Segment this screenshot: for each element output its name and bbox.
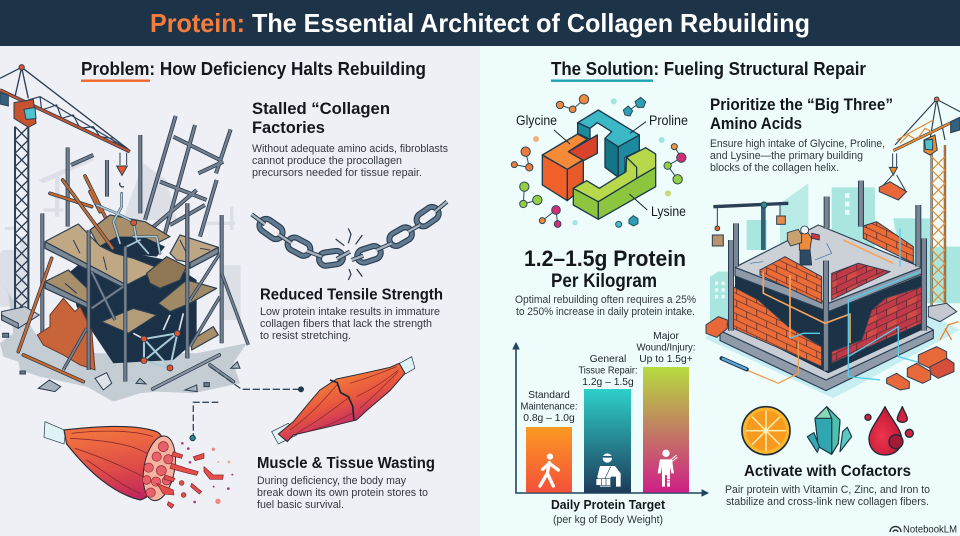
bar labels	[520, 331, 696, 424]
amino acid labels: Lysine	[651, 204, 686, 219]
front columns	[89, 203, 187, 382]
illustration: collapsed collagen scaffold	[0, 65, 248, 402]
right panel background	[480, 0, 960, 536]
reduced tensile strength text	[260, 286, 443, 342]
big three text: and Lysine—the primary building	[710, 150, 863, 162]
broken collagen strands, upper	[97, 193, 160, 253]
bar labels: 0.8g – 1.0g	[523, 413, 575, 424]
front column highlight	[89, 203, 187, 382]
muscle and tissue wasting text: During deficiency, the body may	[257, 475, 407, 487]
icon: blood drop	[865, 407, 913, 455]
skyline	[710, 183, 960, 330]
illustration: torn muscle	[210, 357, 415, 444]
bar: general tissue repair	[584, 389, 631, 492]
top slab	[735, 225, 922, 312]
icon: broken chain	[252, 202, 447, 280]
protein target text: Optimal rebuilding often requires a 25%	[515, 294, 696, 306]
big three text: Amino Acids	[710, 115, 802, 133]
pipe highlight	[723, 359, 746, 369]
icon: injured person	[658, 450, 677, 487]
solution heading: The Solution: Fueling Structural Repair	[551, 59, 866, 79]
fallen beams	[18, 258, 233, 389]
protein target text	[515, 246, 696, 318]
beam highlight	[63, 180, 113, 248]
rubble stones	[3, 333, 240, 392]
slab cracks	[65, 240, 210, 293]
icon: crystal	[807, 407, 852, 454]
reduced tensile strength text: Reduced Tensile Strength	[260, 286, 443, 304]
crane parts	[879, 97, 960, 322]
title: Protein: The Essential Architect of Collagen Rebuilding	[150, 8, 810, 38]
small crane	[713, 203, 788, 250]
icon: amino acid blocks	[511, 95, 686, 227]
dark interior	[68, 247, 197, 363]
big three text: Prioritize the “Big Three”	[710, 96, 893, 114]
bar: major wound	[643, 367, 689, 492]
collagen fibres	[747, 228, 933, 383]
clamp	[940, 322, 958, 340]
hole in slab	[98, 237, 165, 258]
big three text: blocks of the collagen helix.	[710, 162, 839, 174]
bar labels: Standard	[528, 390, 570, 401]
axes	[516, 346, 703, 493]
protein target text: to 250% increase in daily protein intake.	[516, 306, 695, 318]
chart title: Daily Protein Target	[551, 497, 666, 512]
base slab	[720, 320, 933, 391]
panel: problem	[0, 59, 448, 511]
icon: walking person	[540, 454, 558, 486]
fallen frame	[71, 116, 231, 237]
big three text: Ensure high intake of Glycine, Proline,	[710, 138, 885, 150]
green block	[573, 148, 656, 219]
upper brick walls	[863, 222, 913, 263]
crane parts	[0, 65, 127, 328]
bar labels: General	[590, 354, 626, 365]
leader lines	[554, 122, 647, 210]
amino acid labels: Glycine	[516, 113, 557, 128]
bar labels: Maintenance:	[520, 402, 578, 412]
problem heading: Problem: How Deficiency Halts Rebuilding	[81, 59, 426, 79]
amino acid labels: Proline	[649, 113, 688, 128]
reduced tensile strength text: Low protein intake results in immature	[260, 306, 440, 318]
bar labels: Tissue Repair:	[578, 366, 638, 376]
protein target text: Per Kilogram	[551, 271, 657, 292]
lower brick walls	[733, 287, 822, 367]
orange broken beams	[50, 176, 108, 223]
front column highlight	[820, 261, 832, 371]
chart subtitle: (per kg of Body Weight)	[553, 514, 663, 526]
stalled collagen factories text	[252, 100, 448, 179]
stalled collagen factories text: Factories	[252, 119, 325, 137]
small crane parts	[712, 202, 785, 246]
bar chart: daily protein target	[513, 331, 708, 526]
muscle and tissue wasting text: fuel basic survival.	[257, 499, 344, 511]
illustration: wasting muscle	[44, 402, 233, 508]
upper brick front walls	[760, 257, 822, 303]
brick piles	[706, 317, 954, 390]
cofactors text	[725, 463, 930, 508]
front column	[817, 261, 835, 371]
crane	[0, 67, 130, 312]
worker	[787, 226, 819, 265]
slabs	[45, 224, 218, 350]
front braces	[63, 253, 248, 370]
node	[131, 220, 137, 226]
stalled collagen factories text: precursors needed for tissue repair.	[252, 167, 422, 179]
muscle and tissue wasting text: Muscle & Tissue Wasting	[257, 455, 435, 472]
back slab	[90, 215, 170, 253]
dark interior	[735, 275, 922, 373]
amino acid labels	[516, 113, 688, 219]
stalled collagen factories text: Stalled “Collagen	[252, 100, 390, 118]
back columns	[731, 181, 924, 331]
cofactors text: Pair protein with Vitamin C, Zinc, and Iron to	[725, 484, 930, 496]
illustration: rebuilding structure	[705, 97, 960, 398]
orange block	[542, 134, 597, 201]
notebooklm logo: NotebookLM	[903, 524, 957, 536]
bar labels: Up to 1.5g+	[639, 354, 693, 365]
collapsed brick wall	[37, 298, 95, 370]
ghost skyline	[0, 157, 241, 320]
bar labels: Wound/Injury:	[636, 342, 696, 354]
panel: solution	[511, 59, 960, 536]
reduced tensile strength text: to resist stretching.	[260, 330, 351, 342]
muscle fragments	[157, 452, 223, 508]
reduced tensile strength text: collagen fibers that lack the strength	[260, 318, 432, 330]
molecules	[511, 95, 686, 227]
stalled collagen factories text: Without adequate amino acids, fibroblasts	[252, 143, 448, 155]
muscle and tissue wasting text: break down its own protein stores to	[257, 487, 428, 499]
header banner	[0, 0, 960, 46]
protein target text: 1.2–1.5g Protein	[524, 246, 686, 271]
muscle and tissue wasting text	[257, 455, 435, 511]
rear columns	[42, 135, 222, 358]
big crane	[883, 99, 960, 307]
ground	[705, 317, 960, 398]
bar: standard maintenance	[526, 427, 572, 492]
pipe	[722, 358, 747, 369]
big three text	[710, 96, 893, 174]
beam over the slab	[63, 180, 113, 248]
collagen strands, lower	[133, 313, 183, 371]
stalled collagen factories text: cannot produce the procollagen	[252, 155, 402, 167]
icon: citrus	[742, 407, 790, 455]
bar labels: Major	[653, 331, 679, 342]
cofactors text: stabilize and cross-link new collagen fibers.	[726, 496, 929, 508]
bar labels: 1.2g – 1.5g	[582, 377, 634, 388]
rubble shadow	[0, 280, 247, 402]
left panel background	[0, 0, 480, 536]
cofactors text: Activate with Cofactors	[744, 463, 911, 480]
teal block	[578, 110, 639, 177]
icon: bandaged arm	[596, 453, 621, 487]
